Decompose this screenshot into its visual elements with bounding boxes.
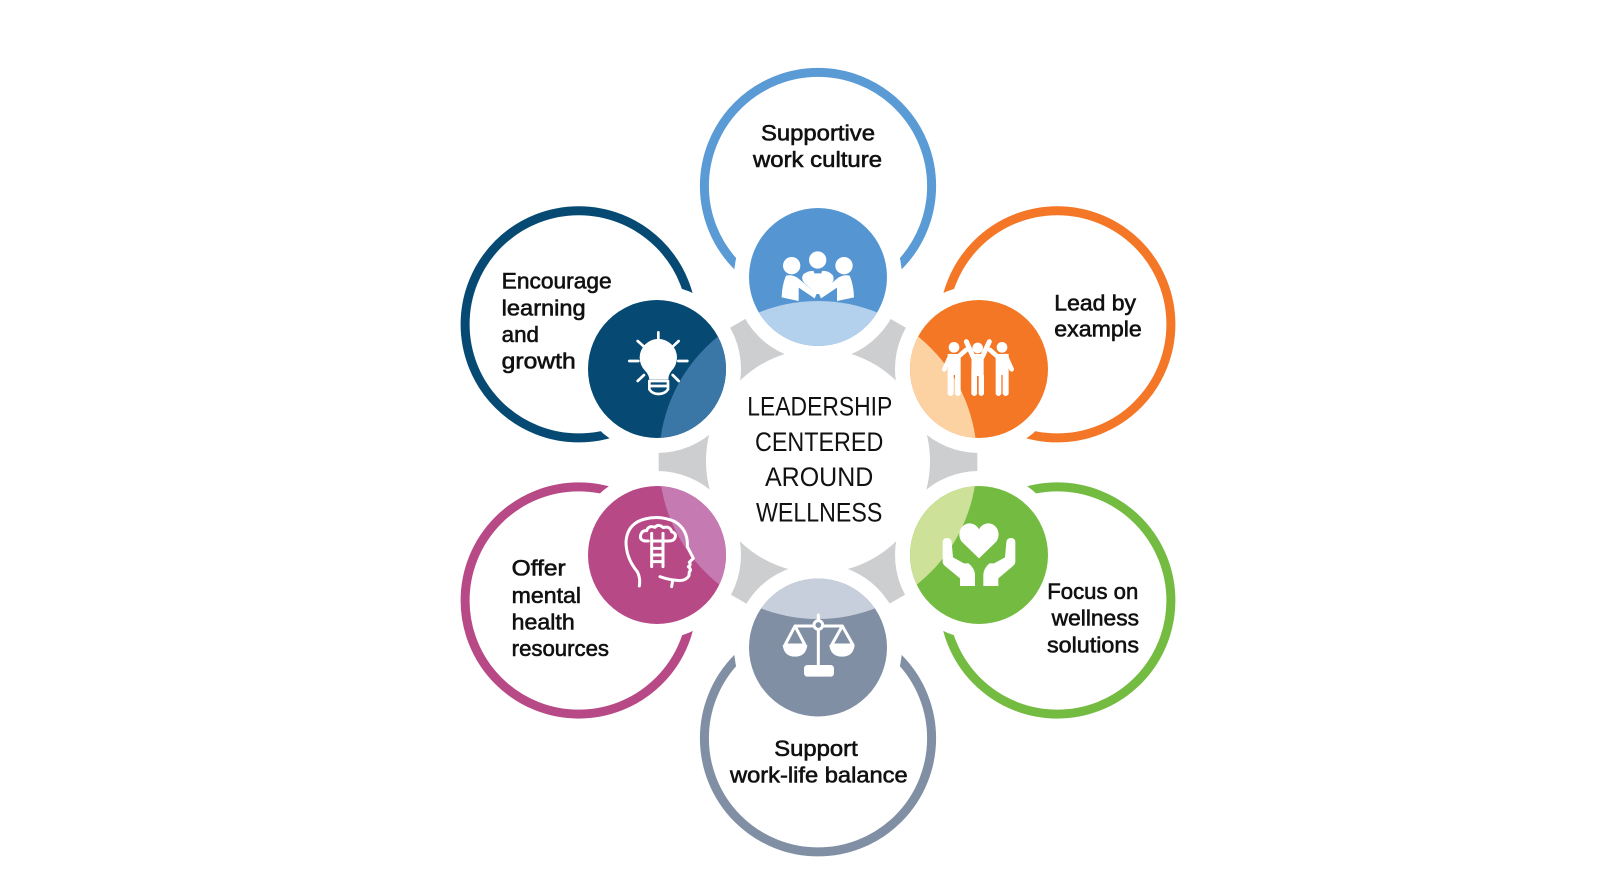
label: health — [512, 610, 575, 634]
icon: lightbulb — [629, 332, 687, 394]
label — [729, 736, 908, 787]
label: wellness — [1051, 606, 1139, 631]
icon: hands holding heart — [943, 523, 1015, 586]
hub title: AROUND — [765, 462, 873, 492]
label: solutions — [1047, 632, 1139, 657]
label: Offer — [512, 556, 566, 581]
label — [752, 121, 882, 172]
panel: supportive work culture — [704, 72, 932, 361]
label: mental — [512, 583, 581, 608]
label: resources — [512, 636, 609, 661]
icon: three people raising arms — [944, 342, 1012, 396]
panel: offer mental health resources — [465, 471, 741, 714]
label: and — [502, 322, 539, 347]
central hub — [706, 349, 930, 573]
label — [502, 269, 612, 374]
panel: encourage learning and growth — [465, 211, 741, 453]
label: work culture — [752, 147, 882, 172]
hub title: CENTERED — [755, 427, 883, 457]
label: growth — [502, 349, 576, 374]
label: Focus on — [1047, 579, 1138, 604]
label: work-life balance — [729, 762, 908, 787]
label — [1047, 579, 1139, 657]
panel: lead by example — [895, 211, 1171, 453]
icon: people with heart — [782, 251, 854, 301]
panel: support work-life balance — [704, 564, 932, 852]
label — [1054, 291, 1142, 342]
label: learning — [502, 295, 586, 320]
label: Support — [774, 736, 858, 761]
hub title — [747, 392, 892, 527]
hub title: LEADERSHIP — [747, 392, 892, 422]
label: Lead by — [1054, 291, 1136, 316]
label — [512, 556, 609, 661]
label: Supportive — [761, 121, 875, 146]
panel: focus on wellness solutions — [895, 471, 1171, 714]
label: Encourage — [502, 269, 612, 294]
hub title: WELLNESS — [756, 497, 882, 527]
label: example — [1054, 316, 1142, 342]
grey connector shapes — [659, 277, 977, 645]
icon: balance scale — [783, 615, 855, 677]
icon: head with ladder and cloud — [626, 517, 693, 587]
